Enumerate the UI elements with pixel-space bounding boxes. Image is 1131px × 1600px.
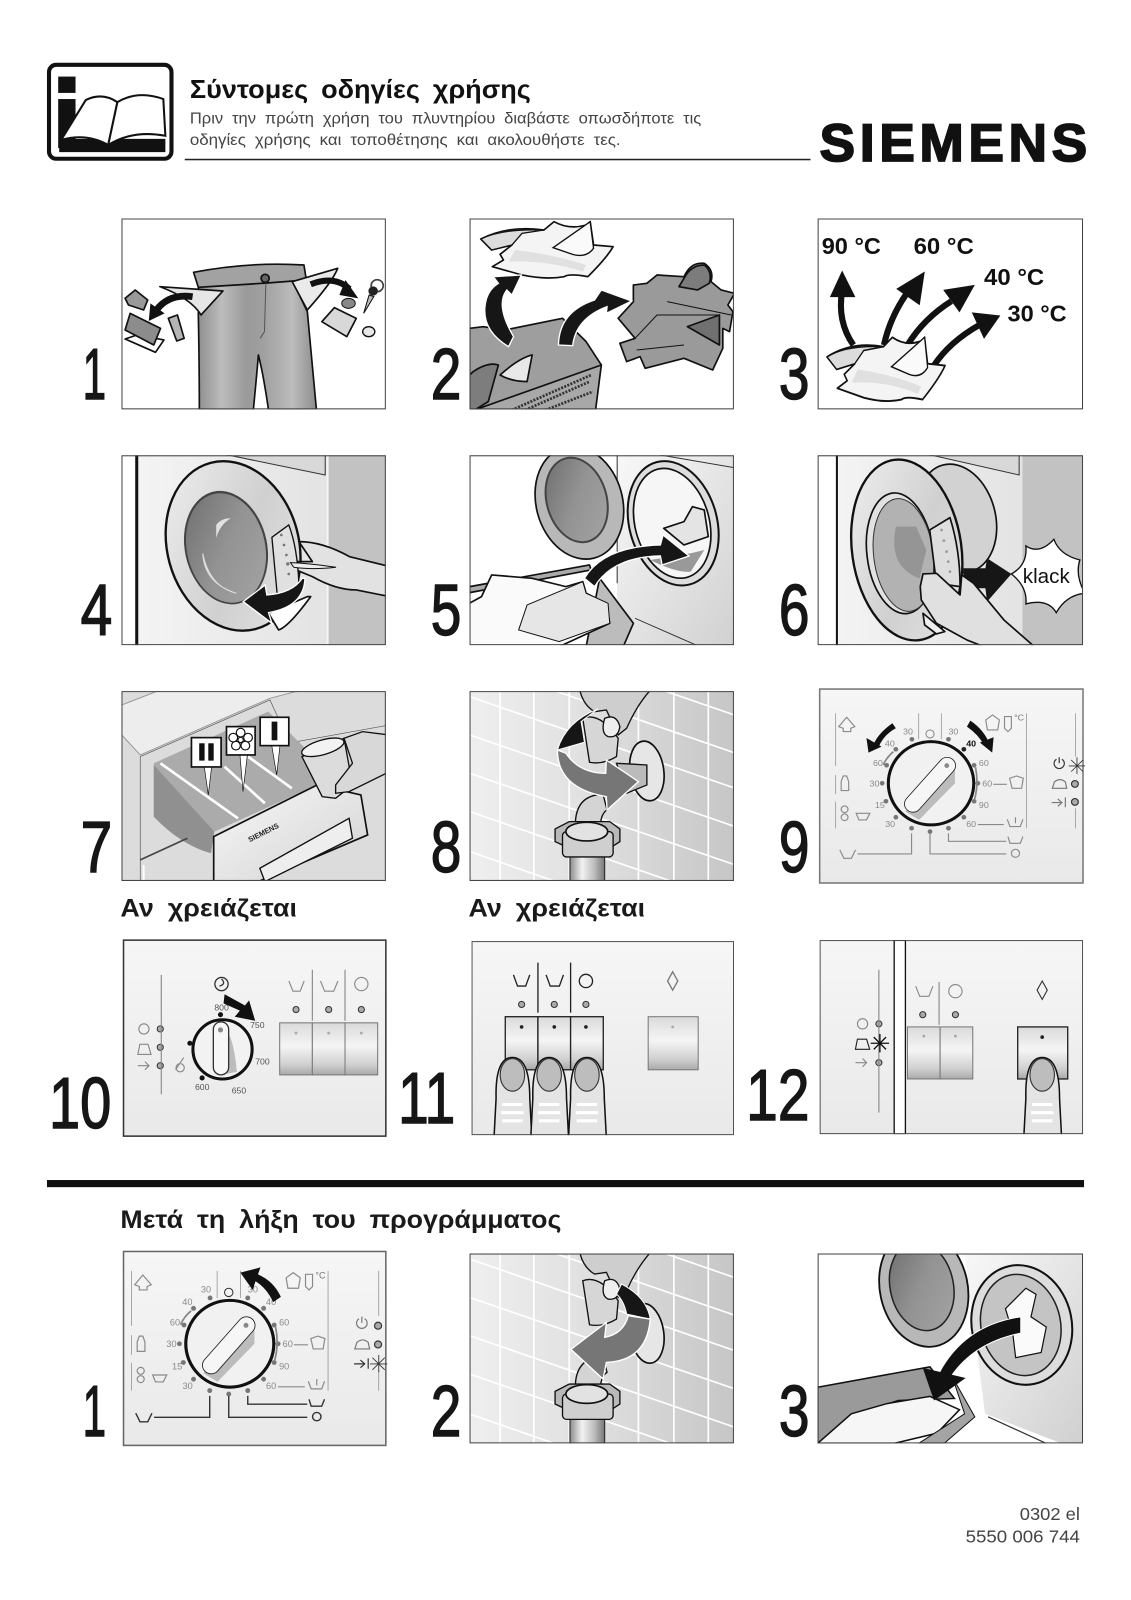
label I [260, 717, 289, 775]
door handle [930, 518, 960, 587]
wash symbols [135, 1273, 325, 1389]
step number 4: 4 [81, 570, 112, 651]
label 60 °C: 60 °C [914, 233, 974, 259]
temperature labels left: 30 [870, 779, 880, 789]
panel 3: wash temperatures [818, 218, 1083, 409]
temperature labels left: 30 [903, 726, 913, 736]
door tab [269, 597, 311, 630]
buttons [505, 1017, 698, 1070]
open drum ring [929, 463, 998, 574]
dial scale dots [880, 737, 980, 834]
logo: SIEMENS: SIEMENS [820, 114, 1087, 173]
panel: turn selector off [124, 1251, 387, 1445]
step number 6: 6 [779, 570, 809, 651]
rotation arrows [866, 721, 994, 753]
guide lines [132, 1271, 379, 1391]
laundry basket [466, 565, 633, 647]
temperature labels left: 15 [172, 1361, 182, 1371]
temperature labels right: 40 [266, 1297, 276, 1307]
arrow [224, 994, 255, 1021]
klack burst [1011, 539, 1085, 613]
temperature labels right: 60 [279, 1318, 289, 1328]
temperature labels right: 30 [948, 726, 958, 736]
temperature labels right [948, 726, 992, 829]
lamps [519, 1001, 589, 1008]
icon: info sign with open book [49, 65, 171, 159]
panel 1: empty pockets [121, 218, 386, 410]
label °C: °C [1014, 713, 1024, 723]
temperature labels left: 30 [201, 1285, 211, 1295]
heading: after the programme: Μετά τη λήξη του προγράμματος [120, 1206, 561, 1234]
laundry basket [470, 318, 601, 410]
tap handle [583, 717, 618, 763]
laundry basket [818, 1367, 975, 1443]
step number 11: 11 [398, 1058, 455, 1139]
step number 3: 3 [779, 1371, 809, 1452]
hand [579, 1251, 652, 1299]
drawer front [214, 785, 368, 882]
title: Σύντομες οδηγίες χρήσης [190, 76, 531, 104]
blinking lamp [871, 1034, 889, 1052]
step number 7: 7 [81, 807, 112, 888]
intro text line 2: οδηγίες χρήσης και τοποθέτησης και ακολουθήστε τες. [190, 132, 621, 149]
dark laundry pile [618, 263, 735, 370]
step number 2: 2 [431, 334, 461, 415]
selector dial [186, 1300, 274, 1387]
coupling nut and pipe [555, 1384, 620, 1446]
step number 9: 9 [779, 807, 809, 888]
label 90 °C: 90 °C [822, 233, 881, 259]
temperature labels left [166, 1285, 211, 1391]
white laundry [827, 337, 945, 401]
temperature labels left: 60 [873, 758, 883, 768]
step number 10: 10 [49, 1063, 111, 1144]
wall flange [626, 739, 668, 803]
temperature labels left: 60 [170, 1318, 180, 1328]
step number 5: 5 [431, 570, 461, 651]
left pocket and objects [125, 287, 223, 352]
panel 11: option buttons [472, 941, 734, 1137]
label II [191, 738, 221, 795]
step number 1: 1 [83, 334, 106, 415]
hand thumb [290, 563, 336, 569]
hand [920, 573, 1034, 647]
wash symbols [839, 715, 1023, 858]
lamps [157, 1006, 364, 1069]
trousers [194, 264, 316, 410]
tap handle [583, 1279, 618, 1325]
header [49, 65, 1087, 173]
step number 12: 12 [746, 1055, 809, 1136]
temperature labels left: 30 [885, 819, 895, 829]
step number 3: 3 [779, 334, 809, 415]
temperature labels left [870, 726, 913, 829]
turning arrow [571, 1284, 650, 1379]
panel: remove laundry [818, 1221, 1083, 1443]
symbols [513, 963, 678, 1013]
wall tiles [470, 688, 738, 882]
label: klack: klack [1023, 566, 1071, 588]
drawer brand: SIEMENS [247, 821, 280, 844]
label 30 °C: 30 °C [1007, 301, 1067, 327]
temperature labels right: 60 [266, 1381, 276, 1391]
spin speeds: 700 [255, 1057, 270, 1067]
door [164, 460, 302, 632]
hand [336, 732, 390, 793]
arrow: to white pile [485, 275, 521, 347]
right pocket and objects [292, 268, 383, 337]
panel 6: close the door [817, 452, 1087, 648]
arrow [923, 1317, 1021, 1401]
machine body [140, 700, 390, 882]
label °C: °C [315, 1271, 326, 1280]
temperature labels left: 40 [182, 1297, 192, 1307]
hand [579, 688, 652, 737]
drawer dividers [160, 757, 292, 818]
cup [300, 734, 352, 798]
panel 2: sort laundry [470, 218, 735, 410]
footer: part number: 5550 006 744 [966, 1526, 1080, 1546]
panel 10: spin speed [124, 940, 386, 1136]
open door [869, 1221, 979, 1355]
symbols [138, 970, 368, 1094]
white laundry [481, 222, 613, 278]
hose elbow [575, 1357, 607, 1387]
temperature labels left: 15 [875, 800, 885, 810]
panel 4: open the door [121, 446, 390, 647]
temperature labels right: 90 [279, 1361, 289, 1371]
temperature labels right: 30 [248, 1285, 258, 1295]
open door [534, 455, 625, 560]
spin icon [215, 977, 228, 991]
finger [1024, 1058, 1062, 1137]
off circle [225, 1288, 233, 1297]
start circle [926, 730, 934, 738]
indicator lamps [1052, 757, 1085, 807]
panel 8: open water tap [470, 688, 738, 883]
arrows [830, 271, 1000, 365]
drum opening with laundry [960, 1256, 1083, 1394]
panel: close water tap [470, 1251, 738, 1446]
section divider [47, 1180, 1084, 1187]
hand [292, 542, 390, 597]
buttons [280, 1023, 378, 1075]
label 40 °C: 40 °C [984, 264, 1044, 290]
arrow [584, 535, 689, 587]
heading: if needed (left): Αν χρειάζεται [120, 895, 297, 923]
spin dial [187, 1012, 252, 1081]
temperature labels right: 60 [966, 819, 976, 829]
lamps [876, 1012, 958, 1066]
temperature labels left: 30 [183, 1381, 193, 1391]
arrow: to dark pile [558, 290, 632, 346]
tap outlet [617, 763, 647, 793]
dial scale dots [177, 1296, 281, 1397]
selector dial [888, 742, 974, 825]
arrow [240, 1267, 281, 1302]
heading: if needed (middle): Αν χρειάζεται [469, 895, 645, 923]
temperature labels right: 60 [982, 779, 992, 789]
intro text line 1: Πριν την πρώτη χρήση του πλυντηρίου διαβάστε οπωσδήποτε τις [190, 111, 702, 128]
wall flange [626, 1301, 668, 1365]
footer: print code: 0302 el [1020, 1504, 1080, 1524]
buttons [907, 1027, 1068, 1079]
panel 5: load the drum [470, 455, 734, 646]
arrow [243, 578, 305, 623]
temperature labels right: 60 [979, 758, 989, 768]
step number 2: 2 [431, 1371, 461, 1452]
step number 8: 8 [431, 807, 461, 888]
door [850, 458, 964, 642]
temperature labels right: 60 [283, 1339, 293, 1349]
indicator lamps [354, 1317, 387, 1372]
fingers [494, 1058, 606, 1137]
spin speeds [195, 1003, 270, 1095]
spin speeds: 800 [214, 1003, 229, 1013]
spin speeds: 600 [195, 1082, 210, 1092]
temperature labels right: 40 [966, 738, 976, 748]
step number 1: 1 [83, 1371, 106, 1452]
spin speeds: 750 [250, 1020, 265, 1030]
temperature labels left: 30 [166, 1339, 177, 1349]
temperature labels left: 40 [885, 738, 895, 748]
arrow [963, 558, 1011, 602]
wall tiles [470, 1251, 738, 1444]
temperature labels right [248, 1285, 293, 1391]
label softener flower [226, 727, 255, 792]
coupling nut and pipe [555, 822, 620, 883]
hose elbow [575, 794, 607, 825]
temperature labels right: 90 [979, 800, 989, 810]
drum opening with laundry [626, 460, 720, 586]
panel 9: programme selector [820, 689, 1085, 883]
panel 7: add detergent [121, 690, 390, 882]
machine top [122, 690, 302, 755]
guide lines [836, 713, 1076, 828]
spin speeds: 650 [232, 1085, 246, 1095]
panel 12: start [820, 940, 1083, 1137]
door handle [271, 524, 300, 593]
wash lines [136, 1396, 325, 1422]
turning arrow [557, 709, 638, 810]
symbols [855, 970, 1047, 1113]
